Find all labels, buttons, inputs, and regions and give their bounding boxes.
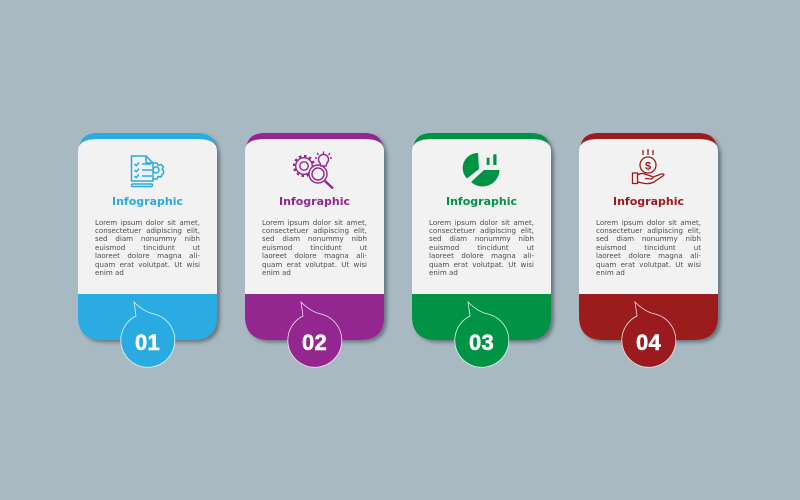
panel: card 04 (579, 133, 723, 368)
body text: consectetuer adipiscing elit, (95, 226, 200, 235)
body text: consectetuer adipiscing elit, (429, 226, 534, 235)
body text: laoreet dolore magna ali- (596, 251, 701, 260)
number: 04 (636, 330, 661, 354)
card 03 shape (412, 133, 556, 368)
icon: hand holding coin: $ (645, 160, 651, 172)
body text: Lorem ipsum dolor sit amet, (262, 218, 367, 226)
body text: sed diam nonummy nibh (262, 234, 367, 243)
body text: laoreet dolore magna ali- (429, 251, 534, 260)
body text: Lorem ipsum dolor sit amet, (596, 218, 701, 226)
body text: euismod tincidunt ut (596, 243, 701, 252)
number: 01 (135, 330, 160, 354)
body text: sed diam nonummy nibh (429, 234, 534, 243)
heading: Infographic (446, 194, 517, 208)
body text: enim ad (262, 268, 291, 277)
body text (596, 218, 701, 277)
body text: consectetuer adipiscing elit, (262, 226, 367, 235)
body text: laoreet dolore magna ali- (262, 251, 367, 260)
number: 03 (469, 330, 494, 354)
heading: Infographic (112, 194, 183, 208)
body text: laoreet dolore magna ali- (95, 251, 200, 260)
icon: pie chart with bars (463, 153, 500, 186)
body text: quam erat volutpat. Ut wisi (262, 260, 367, 269)
card 02 shape (245, 133, 389, 368)
body text (429, 218, 534, 277)
body text: quam erat volutpat. Ut wisi (429, 260, 534, 269)
icon: gear, bulb and magnifier (294, 152, 333, 188)
number: 02 (302, 330, 327, 354)
body text: enim ad (596, 268, 625, 277)
heading: Infographic (613, 194, 684, 208)
card 01 shape (78, 133, 222, 368)
body text (262, 218, 367, 277)
body text: euismod tincidunt ut (429, 243, 534, 252)
icon: hand holding coin (632, 149, 664, 184)
panel: card 01 (78, 133, 222, 368)
card 04 shape (579, 133, 723, 368)
body text: sed diam nonummy nibh (95, 234, 200, 243)
icon: document with gear (132, 156, 164, 186)
body text: sed diam nonummy nibh (596, 234, 701, 243)
body text: euismod tincidunt ut (95, 243, 200, 252)
panel: card 03 (412, 133, 556, 368)
body text (95, 218, 200, 277)
body text: Lorem ipsum dolor sit amet, (95, 218, 200, 226)
body text: euismod tincidunt ut (262, 243, 367, 252)
body text: quam erat volutpat. Ut wisi (95, 260, 200, 269)
body text: enim ad (95, 268, 124, 277)
body text: quam erat volutpat. Ut wisi (596, 260, 701, 269)
body text: enim ad (429, 268, 458, 277)
panel: card 02 (245, 133, 389, 368)
body text: Lorem ipsum dolor sit amet, (429, 218, 534, 226)
heading: Infographic (279, 194, 350, 208)
body text: consectetuer adipiscing elit, (596, 226, 701, 235)
